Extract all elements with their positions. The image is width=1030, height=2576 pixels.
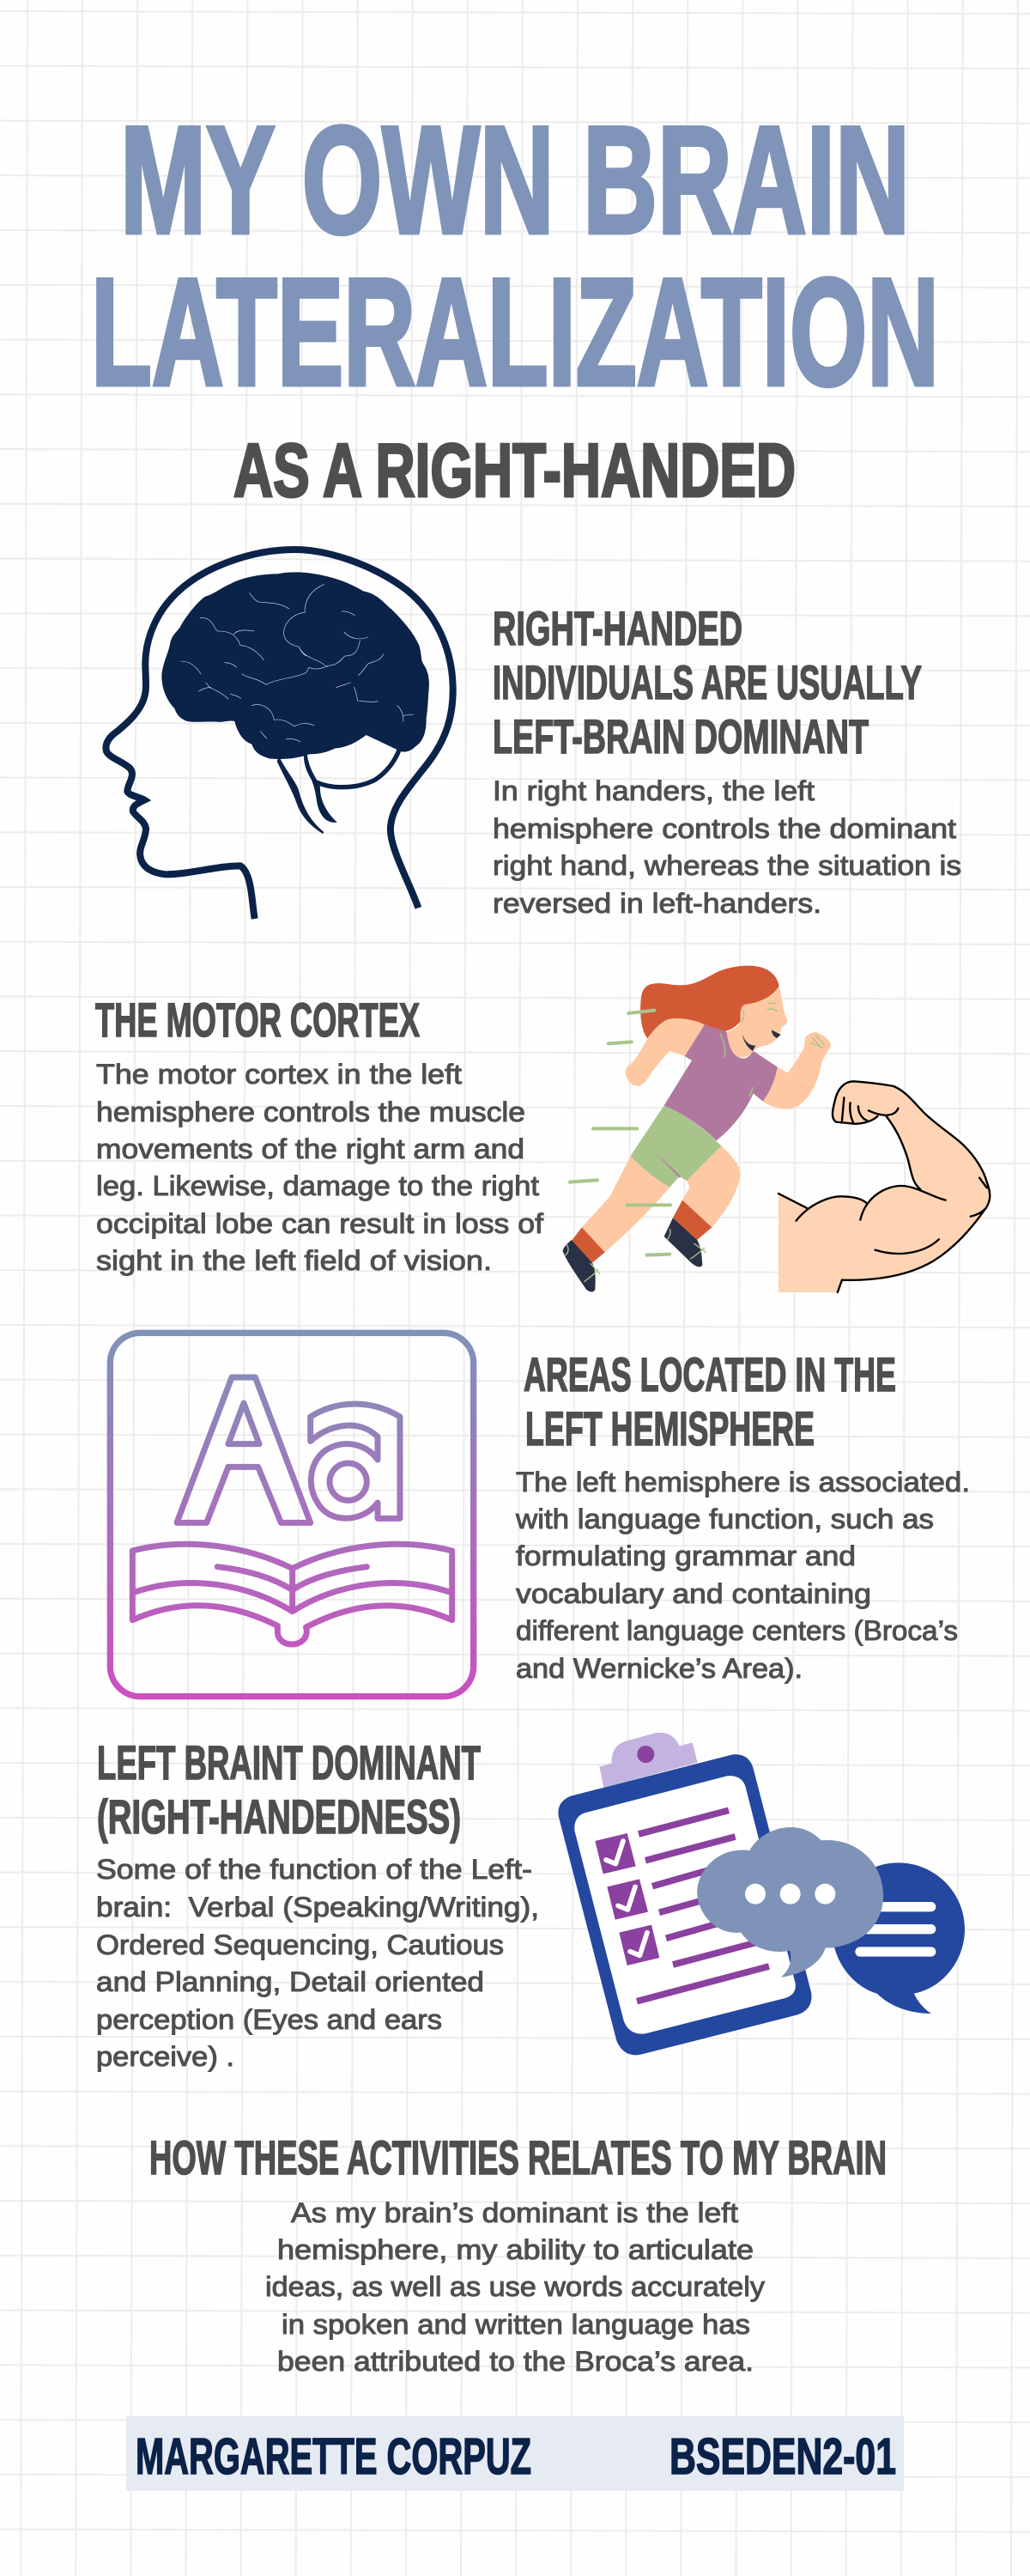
section 3 heading: LEFT HEMISPHERE bbox=[525, 1401, 815, 1455]
section 4 heading: (RIGHT-HANDEDNESS) bbox=[97, 1789, 461, 1844]
shirt bbox=[664, 1024, 778, 1140]
section 2 text: leg. Likewise, damage to the right bbox=[96, 1170, 539, 1201]
arm outline bbox=[779, 1081, 990, 1292]
bubble dots bbox=[745, 1884, 835, 1905]
section 2 text: movements of the right arm and bbox=[96, 1133, 524, 1164]
front arm bbox=[763, 1032, 831, 1109]
section 2 text: sight in the left field of vision. bbox=[96, 1245, 492, 1276]
section 3 text: and Wernicke’s Area). bbox=[516, 1653, 803, 1684]
icon: language book bbox=[110, 1333, 474, 1697]
brain silhouette bbox=[161, 572, 429, 759]
section 4 text: Ordered Sequencing, Cautious bbox=[96, 1929, 504, 1960]
illustration: clipboard and speech bubbles bbox=[558, 1733, 965, 2055]
closing text: in spoken and written language has bbox=[282, 2309, 750, 2340]
section 4 text: perceive) . bbox=[96, 2041, 234, 2072]
section 2 text: hemisphere controls the muscle bbox=[96, 1097, 525, 1127]
head outline bbox=[106, 550, 453, 919]
illustration: running girl bbox=[562, 966, 831, 1292]
shorts bbox=[631, 1105, 721, 1188]
open book bbox=[132, 1544, 452, 1644]
hair bbox=[640, 966, 779, 1038]
letter a bbox=[311, 1404, 400, 1518]
closing text: hemisphere, my ability to articulate bbox=[277, 2234, 754, 2265]
section 4 heading: LEFT BRAINT DOMINANT bbox=[97, 1735, 481, 1789]
arm fill bbox=[779, 1081, 990, 1292]
section 3 text: formulating grammar and bbox=[516, 1540, 856, 1571]
legs bbox=[582, 1145, 741, 1252]
illustration: flexed arm bbox=[779, 1081, 990, 1292]
closing text: As my brain’s dominant is the left bbox=[291, 2197, 738, 2228]
letter A bbox=[177, 1377, 311, 1522]
cloud speech bubble bbox=[697, 1827, 883, 1978]
bubble lines bbox=[860, 1907, 931, 1952]
section 2 text: The motor cortex in the left bbox=[96, 1059, 462, 1090]
head and neck bbox=[727, 986, 787, 1058]
title bbox=[91, 94, 939, 417]
clipboard paper bbox=[574, 1776, 796, 2034]
class code: BSEDEN2-01 bbox=[670, 2428, 896, 2485]
clipboard clip bbox=[599, 1733, 698, 1788]
section 2 text bbox=[96, 1059, 543, 1276]
section 4 text: Some of the function of the Left- bbox=[96, 1854, 532, 1885]
section 1 text: In right handers, the left bbox=[493, 775, 815, 806]
brain stem bbox=[278, 754, 335, 833]
blue speech bubble bbox=[832, 1862, 965, 2014]
brain folds bbox=[181, 585, 414, 742]
section 3 text: with language function, such as bbox=[515, 1504, 934, 1534]
back arm bbox=[626, 1018, 705, 1086]
section 3 text: The left hemisphere is associated. bbox=[516, 1467, 970, 1498]
section 4 text: perception (Eyes and ears bbox=[96, 2004, 442, 2035]
icon: head with brain bbox=[106, 550, 453, 919]
section 4 text: and Planning, Detail oriented bbox=[96, 1966, 484, 1997]
checklist lines bbox=[637, 1810, 769, 2002]
section 2 text: occipital lobe can result in loss of bbox=[96, 1208, 543, 1239]
section 4 heading bbox=[97, 1735, 481, 1844]
closing text bbox=[265, 2197, 765, 2377]
section 3 text: vocabulary and containing bbox=[516, 1578, 871, 1609]
speed lines bbox=[570, 1011, 670, 1255]
section 1 heading bbox=[493, 601, 922, 763]
section 1 text: right hand, whereas the situation is bbox=[493, 850, 961, 881]
section 4 text: brain: Verbal (Speaking/Writing), bbox=[96, 1892, 539, 1923]
section 2 heading: THE MOTOR CORTEX bbox=[95, 993, 420, 1047]
section 1 text: hemisphere controls the dominant bbox=[493, 813, 956, 844]
section 1 text: reversed in left-handers. bbox=[493, 888, 821, 919]
shoes bbox=[562, 1218, 702, 1292]
rounded frame bbox=[110, 1333, 474, 1697]
footer bar bbox=[126, 2416, 904, 2491]
section 3 heading bbox=[524, 1347, 896, 1455]
section 1 text bbox=[493, 775, 961, 919]
closing text: ideas, as well as use words accurately bbox=[265, 2271, 765, 2302]
socks bbox=[572, 1200, 712, 1263]
subtitle: AS A RIGHT-HANDED bbox=[233, 428, 796, 513]
section 3 text bbox=[515, 1467, 970, 1684]
check boxes bbox=[595, 1833, 659, 1965]
author name: MARGARETTE CORPUZ bbox=[136, 2428, 531, 2485]
section 3 text: different language centers (Broca’s bbox=[516, 1615, 958, 1646]
clipboard board bbox=[558, 1754, 811, 2055]
section 1 heading: RIGHT-HANDED bbox=[493, 601, 742, 655]
closing text: been attributed to the Broca’s area. bbox=[277, 2346, 754, 2377]
section 4 text bbox=[96, 1854, 539, 2072]
